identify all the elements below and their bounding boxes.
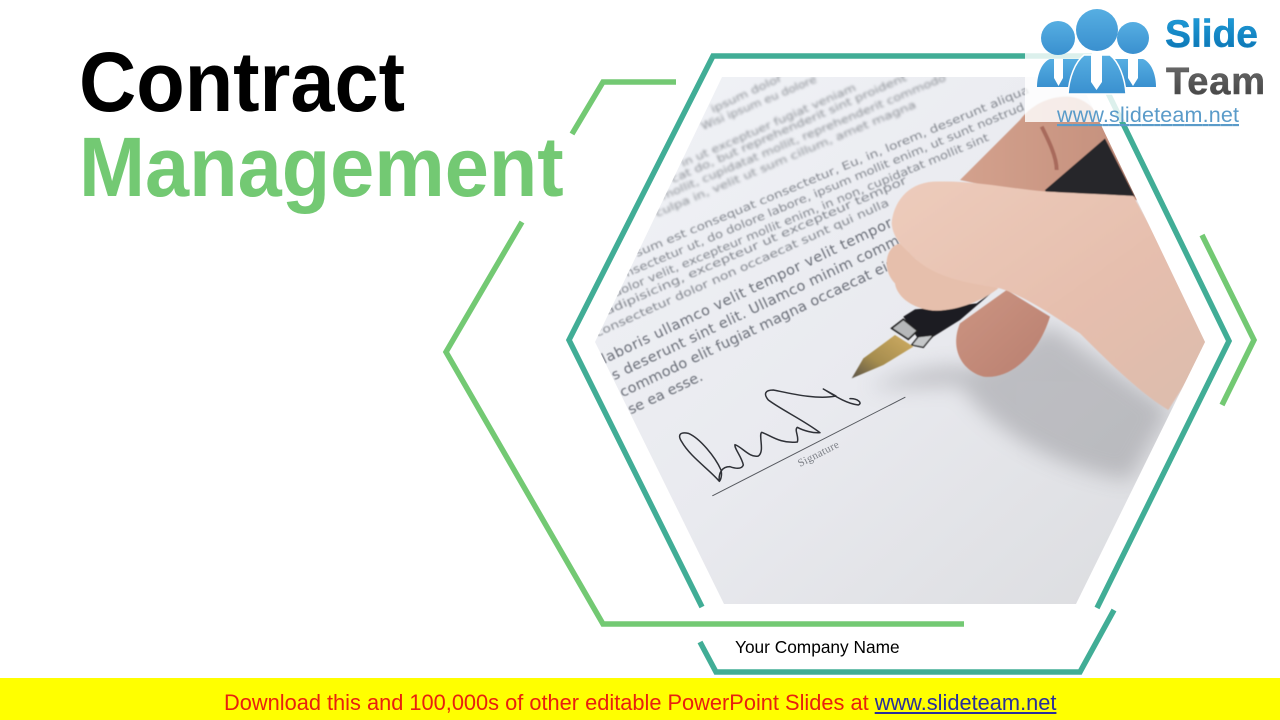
blurred contract paragraphs, top: cat do, but reprehenderit sint proident xyxy=(669,72,909,186)
hand and fountain pen xyxy=(852,97,1213,410)
banner text: Download this and 100,000s of other editable PowerPoint Slides at www.slideteam.net xyxy=(224,690,1056,715)
blurred contract paragraph, middle: adipisicing, excepteur ut excepteur tempor xyxy=(603,174,909,318)
teal hexagon frame segments xyxy=(569,56,1229,672)
photo: hand signing a contract xyxy=(590,70,1213,610)
title: Contract: Contract xyxy=(79,34,405,129)
blurred contract paragraphs, top: mollit, cupidatat mollit, reprehenderit commodo xyxy=(659,72,948,203)
blurred contract paragraph, middle: nsectetur ut, do dolore labore, ipsum mollit enim, ut sunt nostrud xyxy=(623,100,1026,280)
logo panel xyxy=(1025,0,1272,127)
sharp contract text near the signature: se ea esse. xyxy=(626,369,706,418)
blurred contract paragraph, middle: sum est consequat consectetur, Eu, in, lorem, deserunt aliqua xyxy=(633,83,1031,260)
blurred contract paragraph, middle: consectetur dolor non occaecat sunt qui nulla xyxy=(593,196,891,340)
blurred contract paragraphs, top: ipsum dolor xyxy=(709,72,785,116)
logo ties xyxy=(1054,55,1138,90)
title: Management: Management xyxy=(79,119,564,214)
blurred contract paragraph, middle: dolor velit, excepteur mollit enim, in non, cupidatat mollit sint xyxy=(611,131,991,300)
blurred contract paragraphs, top xyxy=(653,72,948,220)
sharp contract text near the signature: commodo elit fugiat magna occaecat eiusmod xyxy=(617,238,936,401)
blurred contract paragraphs, top: culpa in, velit ut sum cillum, amet magna xyxy=(653,99,918,220)
company name: Your Company Name xyxy=(735,637,900,657)
signature caption: Signature xyxy=(796,439,841,470)
paper background xyxy=(590,70,1210,610)
signature xyxy=(680,389,905,496)
hand shadow on paper xyxy=(868,325,1170,480)
blurred contract paragraphs, top: Wisi ipsum eu dolore xyxy=(700,74,818,133)
logo wordmark: Team: Team xyxy=(1166,61,1265,103)
sharp contract text near the signature: s deserunt sint elit. Ullamco minim commodo xyxy=(609,221,928,384)
sharp contract text near the signature: laboris ullamco velit tempor velit tempor xyxy=(599,215,895,368)
logo url: www.slideteam.net xyxy=(1056,103,1239,127)
blurred contract paragraphs, top: in ut exceptuer fugiat veniam xyxy=(679,82,858,170)
logo wordmark: Slide: Slide xyxy=(1165,13,1258,56)
logo people icon xyxy=(1037,9,1156,94)
download banner xyxy=(0,678,1280,720)
logo backing xyxy=(1025,0,1272,122)
green hexagon frame segments xyxy=(446,82,1254,624)
hexagon artwork: frames, photo and logo xyxy=(442,9,1263,675)
blurred contract paragraph, middle xyxy=(593,83,1031,340)
